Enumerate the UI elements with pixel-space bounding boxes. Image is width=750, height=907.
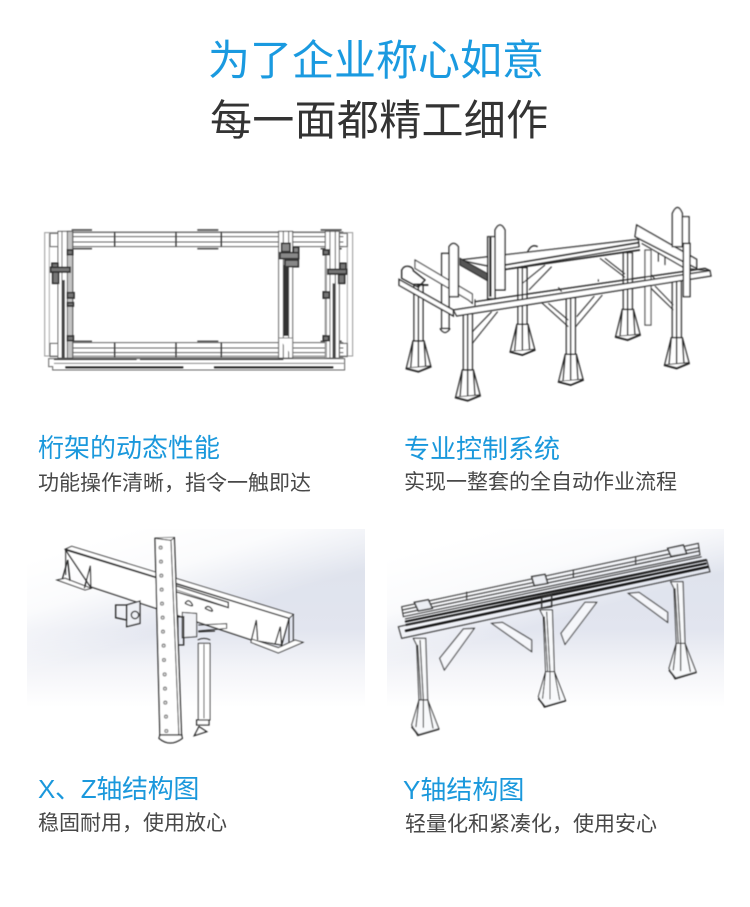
left and right beams [635, 225, 697, 268]
braces [472, 312, 498, 343]
caption: X and Z axis text: 稳固耐用，使用放心 [38, 812, 227, 835]
middle column [279, 231, 293, 358]
title: dark headline: 每一面都精工细作 [210, 97, 548, 144]
uprights [449, 243, 458, 297]
panel highlight [27, 529, 365, 752]
caption: Y axis text: 轻量化和紧凑化，使用安心 [405, 813, 657, 836]
panel: X and Z axis structure [27, 529, 365, 752]
base rails [49, 359, 345, 370]
panel: isometric gantry drawing [399, 207, 711, 401]
X and Z axis line drawing [57, 538, 303, 743]
caption: control system heading: 专业控制系统 [404, 434, 560, 464]
front beam [453, 271, 711, 316]
top rail [402, 543, 700, 617]
braces [440, 628, 474, 670]
caption: Y axis heading: Y轴结构图 [403, 775, 524, 805]
title: blue headline: 为了企业称心如意 [208, 37, 544, 84]
panel highlight [387, 529, 724, 752]
caption: gantry dynamics text: 功能操作清晰，指令一触即达 [38, 472, 311, 495]
rear columns [645, 250, 651, 325]
right column [325, 231, 339, 358]
legs [455, 313, 481, 401]
legs [412, 638, 439, 736]
Y axis line drawing [398, 543, 710, 736]
main beam [398, 560, 710, 638]
panel background [27, 529, 365, 752]
left column [58, 231, 73, 358]
caption: control system text: 实现一整套的全自动作业流程 [404, 471, 677, 494]
caption: X and Z axis heading: X、Z轴结构图 [38, 774, 199, 804]
outer frame [45, 233, 353, 356]
rear beam [460, 239, 639, 269]
panel: Y axis structure [387, 529, 724, 752]
perforated column [155, 538, 182, 743]
hanging cylinder [198, 643, 210, 720]
caption: gantry dynamics heading: 桁架的动态性能 [38, 433, 220, 463]
bottom beam [70, 343, 343, 357]
panel: top-view gantry drawing [45, 230, 353, 370]
top beam [70, 232, 343, 247]
carriages [414, 600, 432, 611]
panel background [387, 529, 724, 752]
